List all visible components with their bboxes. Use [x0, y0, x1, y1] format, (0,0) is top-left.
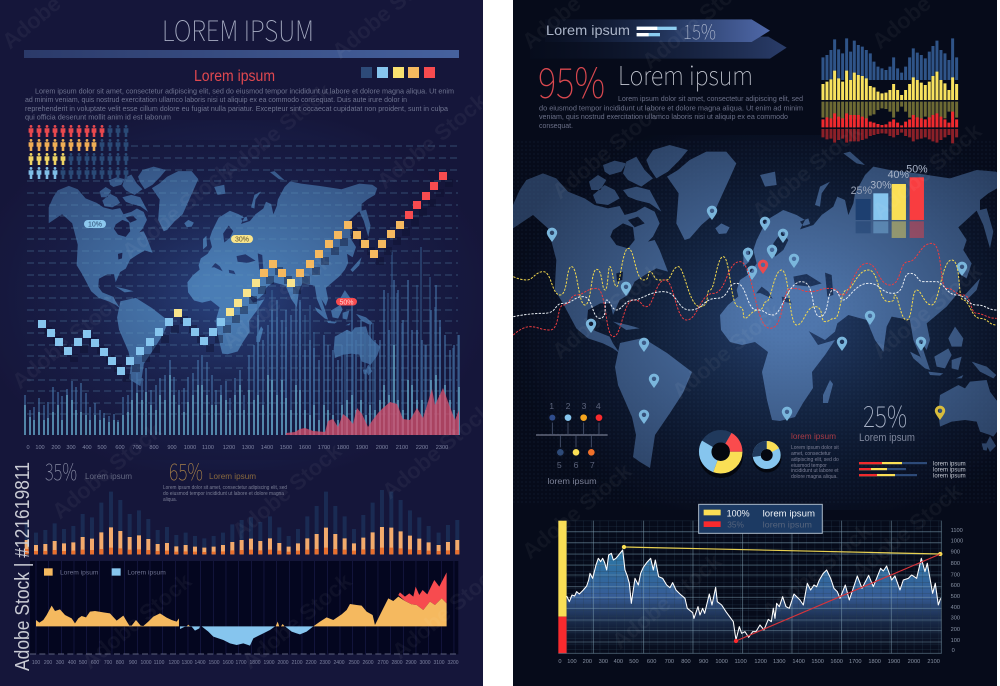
chart data line: [567, 550, 941, 640]
area chart axis labels: 1100: [154, 660, 165, 666]
y axis labels: 900: [951, 550, 960, 556]
donut caption: incididunt ut labore et: [791, 468, 839, 474]
row: orange people: [29, 139, 96, 151]
mid blue bars: [25, 280, 459, 435]
panel: left infographic: [0, 0, 483, 686]
red reflection: [823, 129, 957, 143]
area chart axis labels: 2400: [333, 660, 345, 666]
x axis labels: 2100: [396, 445, 408, 451]
area chart axis labels: 200: [44, 660, 52, 666]
intro paragraph: reprehenderit in voluptate velit esse cillum dolore eu fugiat nulla pariatur. Excepteur sint occaecat cupidatat non proident, sunt in culpa: [25, 104, 449, 113]
stat: 35%: 35%: [45, 453, 77, 487]
watermark pattern: Adobe Stock: [227, 438, 347, 544]
column chart on map: [851, 164, 928, 238]
heading: red lorem ipsum: Lorem ipsum: [194, 68, 275, 85]
donut caption: dolore magna aliqua.: [791, 474, 838, 480]
x axis labels: 1700: [849, 659, 862, 665]
x axis labels: 700: [665, 659, 674, 665]
area chart axis labels: 1700: [235, 660, 247, 666]
x axis labels: 1400: [792, 659, 805, 665]
x axis labels: 2100: [927, 659, 940, 665]
x axis labels: 100: [567, 659, 577, 665]
watermark pattern: Adobe Stock: [47, 418, 167, 524]
stat: 25%: 25%: [863, 394, 907, 436]
legend: Lorem ipsum: [127, 570, 166, 577]
watermark pattern: Adobe Stock: [547, 258, 667, 364]
numbered dots legend: 6: [574, 460, 579, 470]
x axis labels: 200: [583, 659, 592, 665]
red squares: [405, 172, 447, 219]
x axis labels: 1600: [299, 445, 311, 451]
faint tall bars: [258, 247, 458, 435]
donut caption: Lorem ipsum dolor sit: [791, 445, 839, 451]
numbered dots legend: lorem ipsum: [547, 476, 597, 486]
dashed gridlines: [27, 146, 458, 414]
watermark pattern: Adobe Stock: [867, 118, 987, 224]
x axis labels: 2000: [376, 445, 388, 451]
area chart axis labels: 100: [32, 660, 40, 666]
x axis labels: 0: [26, 445, 30, 451]
yellow reflection: [823, 102, 957, 119]
area chart axis labels: 1200: [168, 660, 180, 666]
area chart axis labels: 300: [56, 660, 64, 666]
stat: 35%: Lorem ipsum: [85, 471, 132, 481]
x axis labels: 900: [699, 659, 708, 665]
donut caption: [791, 431, 839, 480]
y axis labels: 300: [951, 616, 960, 622]
orange bar chart: [27, 490, 457, 554]
x axis labels: 400: [614, 659, 623, 665]
row: red people: [29, 125, 104, 137]
stat paragraph: do eiusmod tempor incididunt ut labore et dolore magna: [163, 491, 284, 497]
watermark pattern: Adobe Stock: [7, 288, 127, 394]
vertical stock id text: Adobe Stock | #121619811: [12, 462, 34, 671]
callout: 10%: 10%: [88, 222, 102, 228]
x axis labels: 600: [647, 659, 656, 665]
x axis labels: 1500: [280, 445, 292, 451]
y axis labels: 1000: [951, 539, 963, 545]
ribbon arrows: [530, 19, 787, 59]
chart legend box: lorem ipsum: [763, 509, 815, 519]
area chart axis labels: 3000: [419, 660, 431, 666]
watermark pattern: Adobe Stock: [117, 158, 237, 264]
stat: 25%: Lorem ipsum: [859, 432, 915, 444]
square step line: [38, 172, 447, 375]
area chart axis labels: 2900: [405, 660, 417, 666]
y axis labels: 600: [951, 583, 960, 589]
stat paragraph: Lorem ipsum dolor sit amet, consectetur adipiscing elit, sed: [163, 485, 287, 491]
x axis labels: 1700: [318, 445, 330, 451]
blue squares: [38, 318, 225, 375]
peach bars: [27, 527, 457, 554]
numbered dots legend: 4: [596, 401, 601, 411]
x axis labels: 300: [66, 445, 76, 451]
horizontal progress bars: lorem ipsum: [933, 474, 966, 480]
x axis labels: 200: [51, 445, 61, 451]
area chart axis labels: 1300: [181, 660, 193, 666]
y axis labels: 800: [951, 561, 960, 567]
unfilled people: [61, 125, 128, 179]
area chart axis labels: 2300: [319, 660, 331, 666]
y axis labels: 700: [951, 572, 960, 578]
x axis labels: 800: [149, 445, 159, 451]
watermark pattern: Adobe Stock: [847, 478, 967, 584]
red wave: [513, 243, 997, 337]
yellow trend line: [622, 545, 942, 556]
watermark pattern: Adobe Stock: [517, 458, 637, 564]
x axis labels: 800: [681, 659, 691, 665]
chart area fill: [567, 550, 942, 653]
legend swatches: [361, 67, 435, 78]
horizontal progress bars: [859, 462, 966, 480]
area chart axis labels: 2000: [277, 660, 289, 666]
watermark pattern: Adobe Stock: [667, 298, 787, 404]
watermark pattern: Adobe Stock: [217, 78, 337, 184]
pictogram rows of people: [29, 125, 128, 179]
donut caption: lorem ipsum: [791, 431, 836, 441]
column: 25%: 25%: [851, 185, 872, 197]
area chart axis labels: 1600: [222, 660, 234, 666]
watermark pattern: Adobe Stock: [867, 258, 987, 364]
world map: right: [513, 145, 1000, 468]
x axis labels: 1200: [754, 659, 767, 665]
intro paragraph: Lorem ipsum dolor sit amet, consectetur adipiscing elit, sed do eiusmod tempor incididunt ut labore et dolore magna aliqua. Ut enim: [35, 86, 454, 96]
watermark pattern: Adobe Stock: [757, 518, 877, 624]
area chart axis labels: 1400: [194, 660, 206, 666]
stat paragraph: aliqua.: [163, 497, 177, 503]
x axis labels: 1800: [337, 445, 349, 451]
yellow wave: [513, 248, 997, 325]
light teal bars: [25, 345, 459, 435]
numbered dots legend: 5: [557, 460, 562, 470]
x axis labels: 500: [629, 659, 639, 665]
x axis labels: 1100: [202, 445, 214, 451]
y axis labels: 0: [952, 648, 955, 654]
donut caption: eiusmod tempor: [791, 463, 827, 469]
x axis labels: 1800: [868, 659, 881, 665]
area chart axis labels: 400: [68, 660, 76, 666]
stat paragraph: [163, 485, 287, 503]
area chart axis labels: 800: [116, 660, 124, 666]
watermark pattern: Adobe Stock: [547, 98, 667, 204]
intro paragraph: [25, 86, 454, 122]
callout: 50%: [336, 298, 357, 306]
numbered dots legend: [536, 401, 608, 486]
pin: red: [758, 260, 768, 274]
y axis labels: 500: [951, 594, 960, 600]
x axis labels: 400: [82, 445, 92, 451]
area chart axis labels: 500: [79, 660, 87, 666]
donut chart: small: [752, 444, 782, 472]
y axis labels: [951, 528, 963, 654]
x axis labels: [558, 659, 940, 665]
dark blue background bars: [27, 490, 457, 554]
watermark pattern: Adobe Stock: [607, 548, 727, 654]
stacked equaliser chart: [823, 38, 957, 143]
paragraph: do eiusmod tempor incididunt ut labore et dolore magna aliqua. Ut enim ad minim: [539, 104, 803, 112]
row: yellow people: [29, 153, 65, 165]
chart legend box: 100%: [727, 509, 750, 519]
dark orange bar bases: [27, 548, 457, 554]
donut caption: adipiscing elit, sed do: [791, 457, 839, 463]
vertical bar chart: [25, 247, 459, 435]
donut caption: amet, consectetur: [791, 451, 831, 457]
map pins: [547, 206, 967, 424]
area chart axis labels: 2500: [348, 660, 360, 666]
x axis labels: 1500: [811, 659, 824, 665]
red area: [398, 572, 447, 610]
y axis labels: 100: [951, 638, 960, 644]
panel: right infographic: [513, 0, 1000, 686]
watermark pattern: Adobe Stock: [387, 558, 507, 664]
x axis labels: 2200: [416, 445, 428, 451]
y axis labels: 200: [951, 627, 960, 633]
row: blue people: [29, 167, 57, 179]
numbered dots legend: 2: [566, 401, 571, 411]
stat: 35%: [46, 463, 132, 480]
column: 40%: 40%: [888, 169, 909, 181]
paragraph: consequat.: [539, 121, 573, 130]
x axis labels: 1200: [223, 445, 235, 451]
callout: 50%: 50%: [339, 300, 354, 306]
x axis labels: 0: [558, 659, 562, 665]
chart legend box: 35%: [727, 519, 745, 529]
x axis labels: 600: [115, 445, 125, 451]
blue bars: [823, 38, 957, 80]
x axis labels: 1600: [830, 659, 843, 665]
area chart axis labels: 2700: [377, 660, 389, 666]
x axis labels: 300: [599, 659, 608, 665]
panel: area chart: [30, 561, 458, 654]
x axis labels: 500: [97, 445, 107, 451]
watermark pattern: Adobe Stock: [237, 568, 357, 674]
area chart axis labels: 1900: [263, 660, 275, 666]
paragraph: Lorem ipsum dolor sit amet, consectetur adipiscing elit, sed: [618, 94, 803, 103]
numbered dots legend: 1: [549, 401, 554, 411]
world map: left: [49, 167, 380, 386]
x axis labels: 1300: [242, 445, 254, 451]
stat: 65%: [170, 463, 256, 480]
x axis labels: 1000: [184, 445, 196, 451]
stat: 65%: 65%: [169, 453, 203, 487]
x axis labels: 100: [35, 445, 45, 451]
y axis labels: 1100: [951, 528, 963, 534]
ribbon percent: 15%: [683, 16, 716, 45]
callout: 30%: 30%: [235, 236, 249, 244]
area chart axis labels: 2600: [362, 660, 374, 666]
dashed wave lines: [513, 243, 997, 337]
ribbon progress bars: [637, 27, 677, 36]
chart legend box: lorem ipsum: [763, 519, 812, 529]
watermark pattern: Adobe Stock: [372, 88, 492, 194]
x axis labels: 1900: [356, 445, 368, 451]
ribbon label: Lorem ipsum: [546, 22, 630, 38]
donut chart: large: [699, 434, 743, 478]
x axis labels: 1300: [773, 659, 786, 665]
area chart axis labels: 3100: [433, 660, 445, 666]
stat: 65%: Lorem ipsum: [209, 471, 256, 481]
paragraph: [539, 94, 803, 130]
numbered dots legend: 3: [582, 401, 587, 411]
x axis labels: [26, 445, 448, 449]
area chart axis labels: 700: [104, 660, 112, 666]
area chart axis labels: 1800: [249, 660, 261, 666]
legend: Lorem ipsum: [60, 570, 99, 577]
pale yellow squares: [174, 279, 295, 317]
column: 50%: 50%: [906, 164, 928, 176]
x axis labels: 2300: [436, 445, 448, 451]
chart legend box: [699, 504, 822, 533]
yellow bars: [823, 71, 957, 100]
area chart axis labels: 1500: [208, 660, 220, 666]
area chart axis labels: 2800: [391, 660, 403, 666]
intro paragraph: qui officia deserunt mollit anim id est laborum: [25, 112, 171, 122]
blue area: [180, 626, 313, 646]
x axis labels: 1000: [715, 659, 728, 665]
x axis labels: 1400: [261, 445, 273, 451]
watermark pattern: Adobe Stock: [747, 118, 867, 224]
area chart axis labels: 900: [129, 660, 137, 666]
white wave: [513, 273, 997, 318]
x axis labels: 900: [167, 445, 177, 451]
intro paragraph: ad minim veniam, quis nostrud exercitation ullamco laboris nisi ut aliquip ex ea commodo consequat. Duis aute irure dolor in: [25, 95, 407, 104]
watermark pattern: Adobe Stock: [377, 398, 497, 504]
horizontal progress bars: lorem ipsum: [933, 468, 966, 474]
title: LOREM IPSUM: [162, 10, 314, 50]
area chart axis labels: 3200: [447, 660, 459, 666]
legend: [44, 568, 166, 577]
red trend line: [734, 554, 940, 643]
area chart axis labels: [32, 660, 459, 666]
area chart axis labels: 1000: [140, 660, 152, 666]
callout: 10%: [84, 220, 106, 228]
horizontal progress bars: lorem ipsum: [933, 462, 966, 468]
callout: 30%: [231, 235, 253, 244]
heading: lorem ipsum: Lorem ipsum: [618, 56, 753, 93]
paragraph: veniam, quis nostrud exercitation ullamco laboris nisi ut aliquip ex ea commodo: [539, 112, 788, 121]
red bars: [823, 112, 957, 127]
watermark pattern: Adobe Stock: [217, 248, 337, 354]
x axis labels: 700: [132, 445, 142, 451]
title bar: [24, 50, 459, 58]
area chart axis labels: 2200: [305, 660, 317, 666]
x axis labels: 1100: [735, 659, 747, 665]
numbered dots legend: 7: [590, 460, 595, 470]
line chart: [558, 504, 963, 665]
y axis labels: 400: [951, 605, 960, 611]
orange area: [36, 597, 447, 626]
x axis labels: 2000: [908, 659, 920, 665]
orange squares: [260, 221, 404, 277]
area chart axis labels: 2100: [291, 660, 303, 666]
big stat: 95%: 95%: [538, 50, 605, 111]
area chart axis labels: 600: [91, 660, 99, 666]
x axis labels: 1900: [888, 659, 900, 665]
pin: yellow: [935, 406, 945, 420]
watermark pattern: Adobe Stock: [77, 568, 197, 674]
column: 30%: 30%: [870, 179, 892, 191]
pink series: [286, 388, 459, 435]
